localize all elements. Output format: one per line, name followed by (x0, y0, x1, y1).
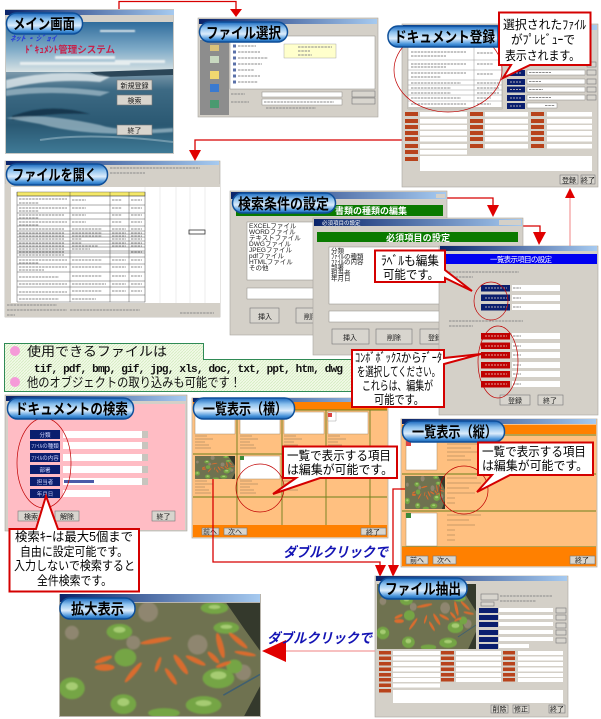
main screen buttons: 新規登録 (120, 81, 148, 90)
extraction buttons: 削除 (492, 704, 506, 714)
panel: document search window: 検索 (24, 512, 38, 521)
label: search conditions: 検索条件の設定 (238, 196, 329, 213)
registration blue fields (507, 60, 596, 109)
label: enlarged view (60, 598, 135, 619)
panel: horizontal list window: 前へ (203, 527, 217, 536)
callout: vertical list editable (477, 442, 593, 492)
panel: vertical list window (401, 419, 597, 567)
required items list: 担当者 (331, 268, 351, 277)
registration buttons (560, 175, 595, 184)
extraction buttons: 終了 (550, 704, 564, 714)
label: document search: ドキュメントの検索 (15, 401, 128, 418)
arrow: vertical list to file extraction (388, 489, 405, 577)
bullet: first note (10, 346, 20, 356)
main screen buttons: 終了 (128, 126, 142, 135)
callout: preview note: 選択されたﾌｧｲﾙ (503, 18, 587, 32)
callout: combo box note (352, 350, 481, 407)
highlight ring: preview area (394, 28, 502, 112)
spreadsheet table (17, 192, 205, 302)
registration buttons: 終了 (581, 176, 595, 184)
panel: file selection window (198, 18, 378, 117)
file type list: EXCELファイル (249, 222, 297, 230)
label: document registration (388, 26, 498, 47)
file type list: テキストファイル (249, 234, 301, 242)
callout: search keys: 入力しないで検索すると (14, 559, 135, 573)
label: file selection: ファイル選択 (206, 25, 281, 42)
arrow: document registration to file open (189, 112, 446, 161)
highlight ring: required labels (474, 282, 508, 320)
callout: preview note: がﾌﾟﾚﾋﾞｭｰで (511, 32, 575, 47)
panel: required items window: 必須項目の設定 (322, 219, 361, 227)
extraction buttons (491, 704, 565, 714)
label: horizontal list: 一覧表示（横） (203, 400, 287, 418)
thumbnails (405, 440, 445, 546)
callout: combo box note: ｺﾝﾎﾞﾎﾞｯｸｽからﾃﾞｰﾀ (355, 351, 442, 365)
note: supported file formats: 使用できるファイルは (27, 344, 167, 359)
panel: list display items window: 終了 (543, 396, 557, 405)
panel: vertical list window: 前へ (410, 556, 424, 564)
callout: combo box note: を選択してください。 (357, 365, 440, 379)
file type list: pdfファイル (249, 252, 285, 260)
search field labels: ﾌｧｲﾙの内容 (31, 454, 59, 462)
highlight ring: optional labels (478, 326, 518, 398)
panel: vertical list window: 終了 (575, 556, 589, 564)
thumbnails (195, 412, 368, 479)
panel: list display items window (439, 246, 598, 415)
arrow: main screen to file selection (119, 2, 242, 17)
callout: combo box note: 可能です。 (374, 392, 424, 407)
note: supported file formats (4, 344, 352, 392)
panel: required items window: 削除 (387, 333, 401, 342)
label: main screen: メイン画面 (13, 16, 75, 33)
highlight ring: horizontal list fields (236, 464, 284, 512)
required items list: ﾌｧｲﾙの種類 (331, 252, 364, 260)
file type list: HTMLファイル (249, 258, 293, 266)
panel: required items window: 登録 (428, 333, 442, 342)
arrow: required items to list items (523, 226, 546, 245)
panel: document search window: 終了 (156, 512, 170, 521)
extraction photo (377, 583, 476, 650)
bullet: second note (10, 377, 20, 387)
callout: labels editable: 可能です。 (383, 267, 439, 282)
panel: vertical list window: 次へ (437, 556, 451, 564)
enlarged koi photo (59, 602, 260, 718)
callout: labels editable: ﾗﾍﾞﾙも編集 (381, 253, 439, 268)
text: double click lower: ダブルクリックで (267, 630, 373, 646)
label: document registration: ドキュメント登録 (394, 28, 495, 46)
panel: list display items window: 登録 (508, 396, 522, 405)
file type list: その他 (249, 263, 269, 272)
panel: file extraction window (375, 576, 568, 717)
arrow: list items back to document registration (565, 188, 575, 246)
callout: search keys: 自由に設定可能です。 (20, 544, 128, 559)
panel: document registration window (402, 24, 598, 187)
panel: required items window (313, 218, 523, 355)
search field labels: 分類 (39, 431, 51, 439)
label: document search (8, 398, 134, 419)
panel: horizontal list window: 次へ (228, 527, 242, 536)
file type list: DWGファイル (249, 240, 291, 248)
search field labels: 部署 (39, 467, 51, 474)
callout: horizontal list editable: は編集が可能です。 (287, 462, 393, 477)
registration orange fields (405, 112, 592, 171)
arrow: horizontal list to file extraction (213, 479, 386, 577)
callout: vertical list editable: 一覧で表示する項目 (482, 444, 586, 459)
callout: combo box note: これらは、編集が (362, 378, 433, 393)
search field labels: ﾌｧｲﾙの種類 (31, 442, 59, 450)
system name text (10, 34, 115, 56)
callout: preview note: 表示されます。 (505, 49, 580, 63)
callout: search keys (10, 496, 139, 592)
file type list: WORDファイル (249, 228, 296, 236)
note: supported file formats: 他のオブジェクトの取り込みも可能です！ (27, 375, 241, 390)
main screen buttons: 検索 (128, 96, 142, 105)
label: vertical list: 一覧表示（縦） (412, 423, 497, 441)
callout: search keys: 検索ｷｰは最大5個まで (15, 530, 133, 544)
required items list: 年月日 (331, 274, 350, 282)
highlight ring: vertical list fields (440, 466, 488, 514)
highlight ring: search keys (17, 418, 71, 508)
panel: list display items window: 一覧表示項目の設定 (490, 254, 552, 264)
panel: search conditions back window: 挿入 (258, 312, 272, 321)
callout: horizontal list editable: 一覧で表示する項目 (287, 448, 391, 463)
panel: document search window (5, 395, 187, 531)
label: enlarged view: 拡大表示 (71, 600, 124, 618)
search inputs (63, 431, 148, 497)
panel: search conditions back window: 書類の種類の編集 (335, 205, 407, 216)
search field labels: 年月日 (37, 490, 53, 498)
panel: file open spreadsheet window (5, 161, 220, 317)
extraction orange fields (379, 651, 563, 703)
text: double click upper: ダブルクリックで (283, 544, 389, 560)
callout: vertical list editable: は編集が可能です。 (482, 458, 588, 473)
label: file open: ファイルを開く (12, 167, 97, 184)
system name text: ﾈｯﾄ・ｼﾞｮｲ (10, 34, 58, 43)
label: vertical list (402, 421, 504, 442)
panel: horizontal list window: 終了 (366, 528, 380, 536)
callout: labels editable (375, 250, 472, 291)
panel: document search window: 解除 (60, 512, 74, 521)
label: main screen (6, 13, 82, 34)
panel: enlarged view window (59, 594, 261, 718)
callout: preview note (499, 12, 590, 78)
label: horizontal list (194, 398, 294, 419)
panel: main screen window (5, 9, 174, 154)
search field labels: 担当者 (37, 478, 54, 486)
search field labels (30, 430, 60, 498)
panel: search conditions back window (230, 191, 447, 335)
arrow: search conditions to required items (447, 198, 499, 217)
required items list: 部署 (331, 264, 344, 272)
file type list: JPEGファイル (249, 246, 292, 254)
required items list: ﾌｧｲﾙの内容 (331, 257, 364, 266)
panel: required items window: 必須項目の設定 (386, 232, 450, 243)
extraction buttons: 修正 (514, 704, 528, 714)
label: file extraction: ファイル抽出 (385, 580, 461, 598)
main screen buttons (117, 80, 152, 135)
panel: search conditions back window: 削除 (304, 312, 318, 321)
panel: horizontal list window (192, 398, 388, 538)
required items list: 分類 (331, 246, 344, 255)
system name text: ﾄﾞｷｭﾒﾝﾄ管理システム (25, 44, 115, 56)
registration buttons: 登録 (562, 176, 576, 184)
arrow: file extraction to enlarged view (262, 640, 375, 662)
panel: required items window: 挿入 (343, 333, 357, 342)
callout: search keys: 全件検索です。 (37, 574, 112, 588)
note: supported file formats: tif, pdf, bmp, gif, jpg, xls, doc, txt, ppt, htm, dwg (34, 364, 343, 376)
callout: horizontal list editable (273, 446, 397, 494)
